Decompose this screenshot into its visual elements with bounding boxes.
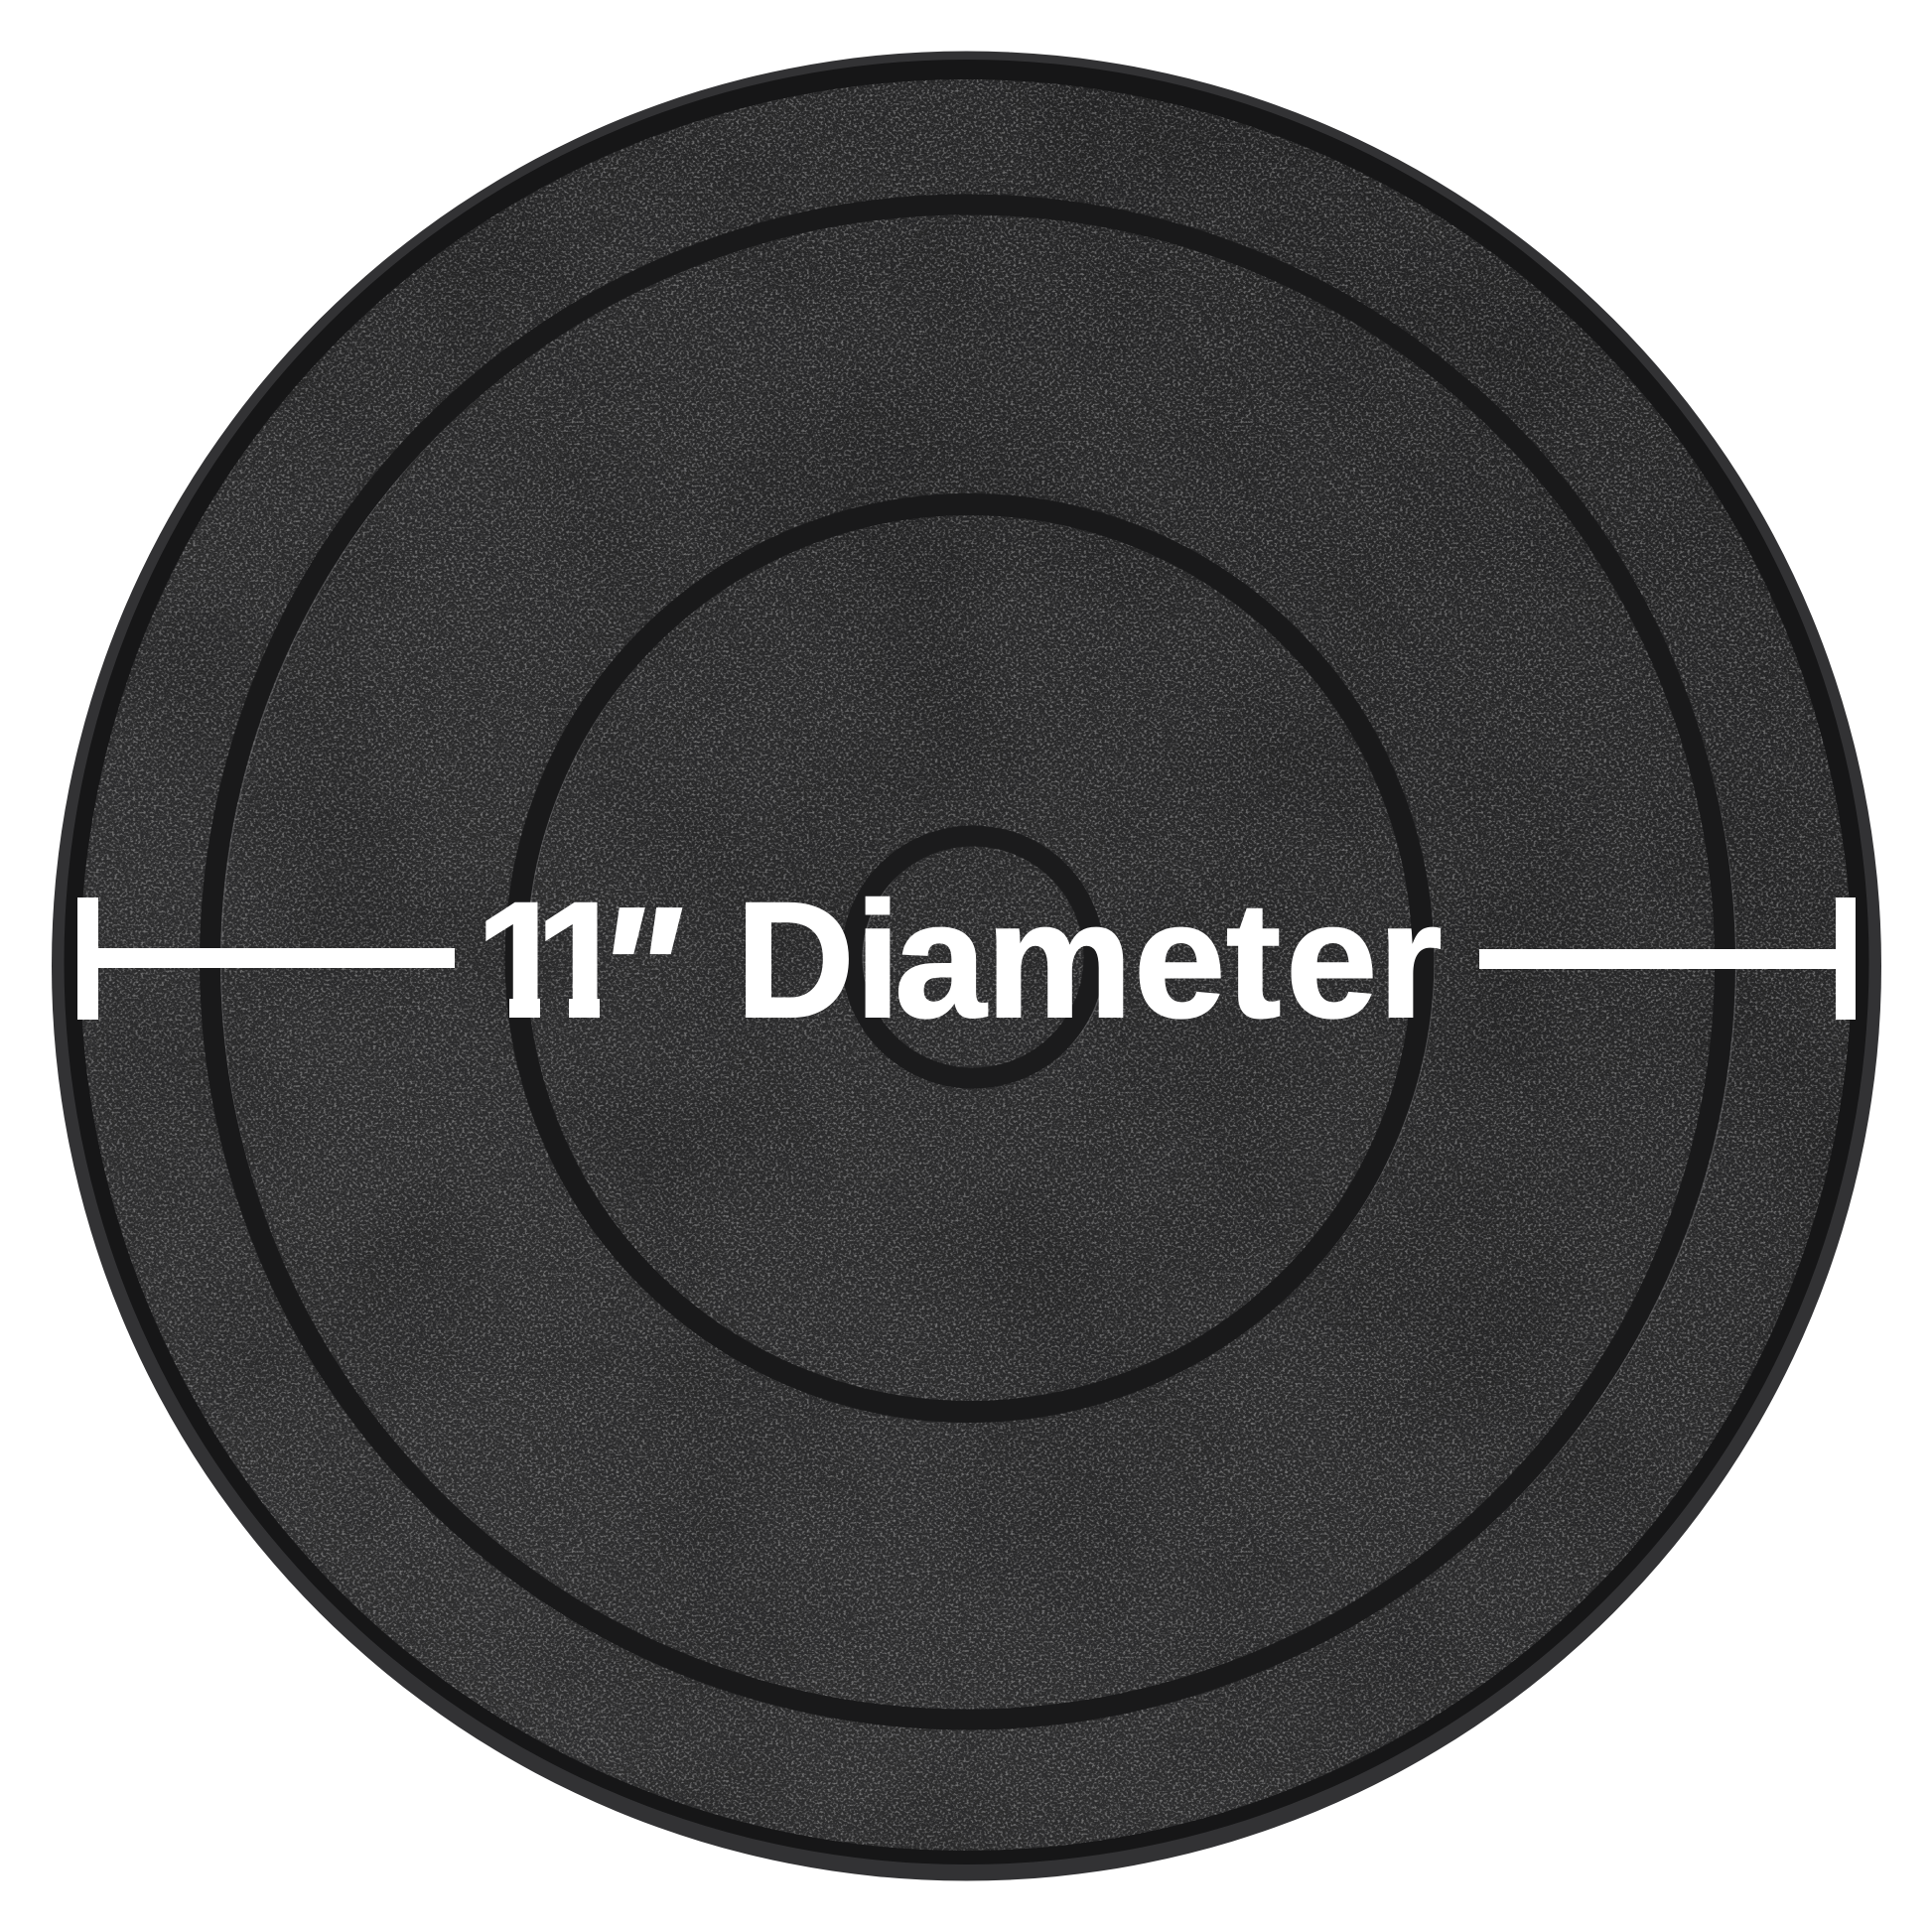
diameter label: " [595, 871, 682, 1070]
left end tick [77, 897, 98, 1020]
outer groove [210, 205, 1735, 1723]
right line [1479, 949, 1856, 969]
diameter label: Diameter [736, 869, 1443, 1052]
diameter dimension line [77, 897, 1856, 1020]
right end tick [1836, 897, 1856, 1020]
centre hub groove [852, 836, 1105, 1081]
middle groove [516, 504, 1434, 1415]
left line [77, 948, 455, 968]
diameter label: 11 [476, 869, 626, 1052]
